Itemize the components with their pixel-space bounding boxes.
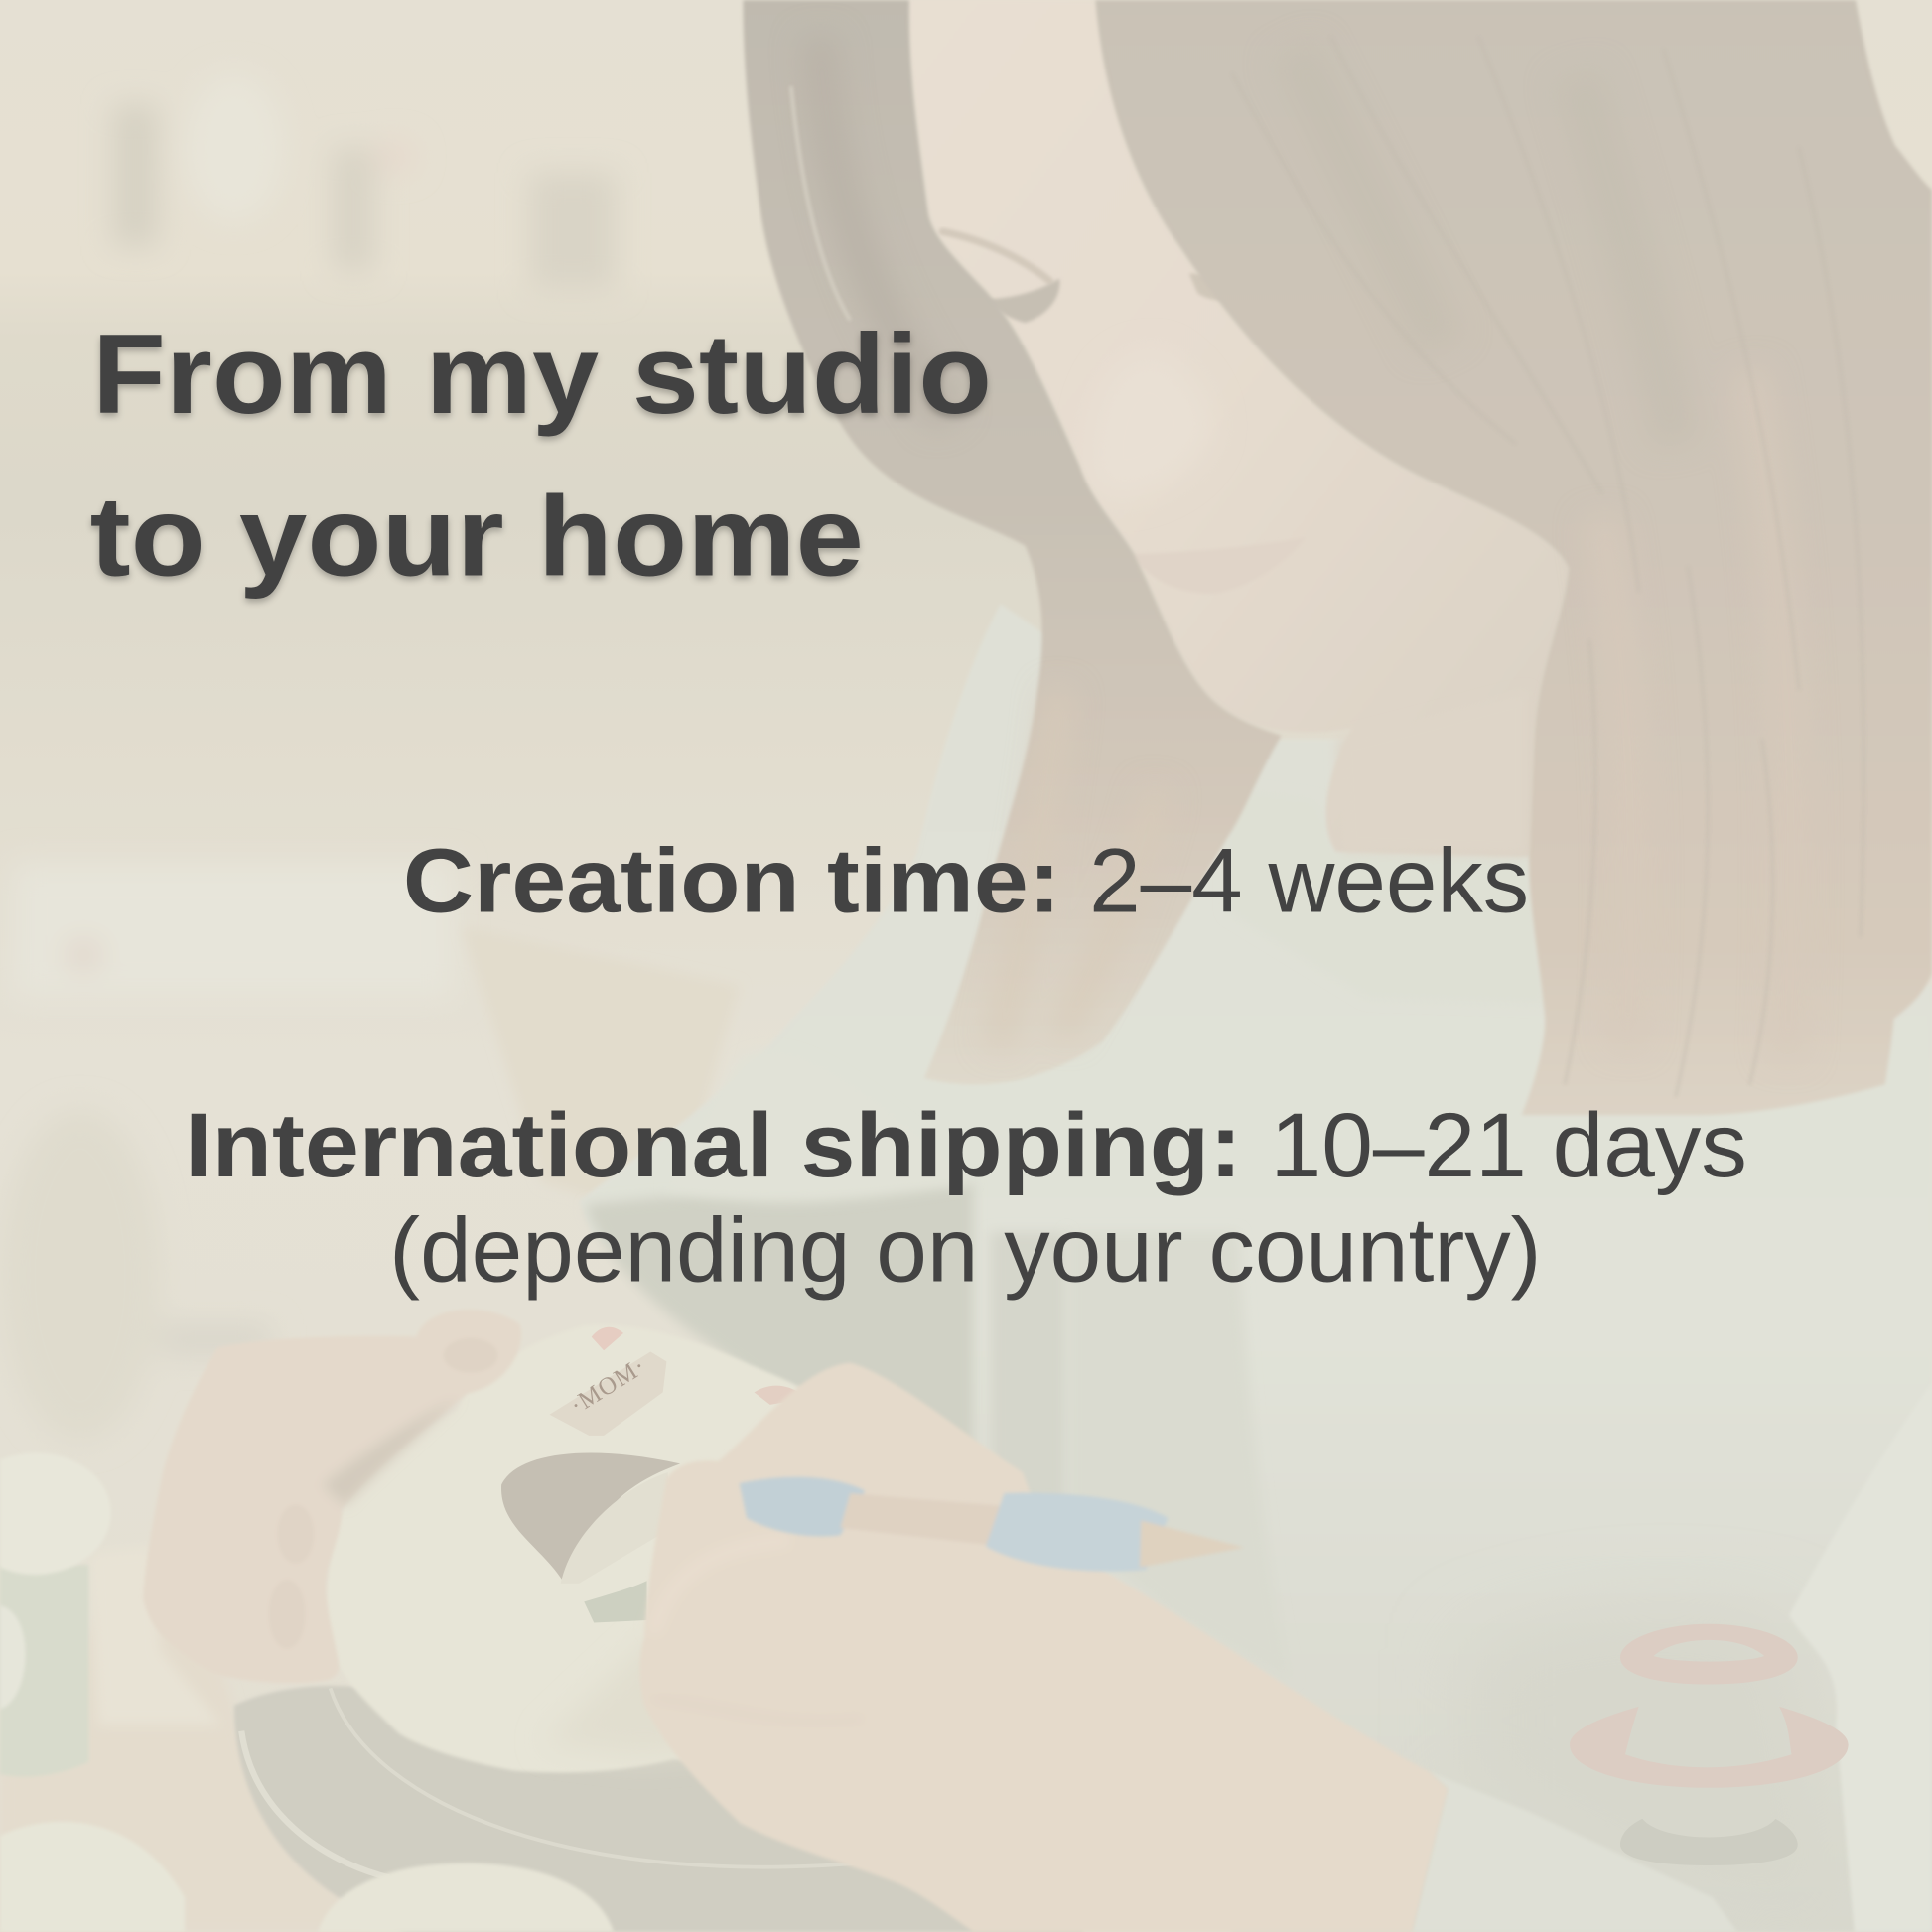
creation time line: 2–4 weeks [1089, 830, 1529, 931]
photo: face and neck [908, 0, 1569, 857]
creation time line [403, 830, 1529, 931]
title: From my studio [92, 312, 992, 438]
photo: jars and turntable [0, 1452, 1084, 1932]
creation time line: Creation time: [403, 830, 1061, 931]
laptop-like cream panel [462, 926, 740, 1201]
international shipping text [185, 1095, 1747, 1302]
logo: stacked ceramic mark [1570, 1624, 1849, 1865]
facial features [942, 231, 1307, 594]
photo: left hand [143, 1310, 521, 1683]
international shipping text: (depending on your country) [389, 1200, 1542, 1302]
photo: ceramic egg being painted: ·MOM· [566, 1352, 651, 1420]
international shipping text: International shipping: [185, 1095, 1242, 1196]
photo: sculpting tool [740, 1477, 1244, 1572]
photo: right hand holding tool [639, 1363, 1448, 1932]
international shipping text: 10–21 days [1271, 1095, 1747, 1196]
photo: ceramic egg being painted [326, 1325, 863, 1772]
title: to your home [90, 475, 864, 601]
title [90, 312, 992, 601]
table [0, 1578, 369, 1932]
photo: hair [743, 0, 1932, 1115]
photo: sweater [579, 604, 1932, 1932]
